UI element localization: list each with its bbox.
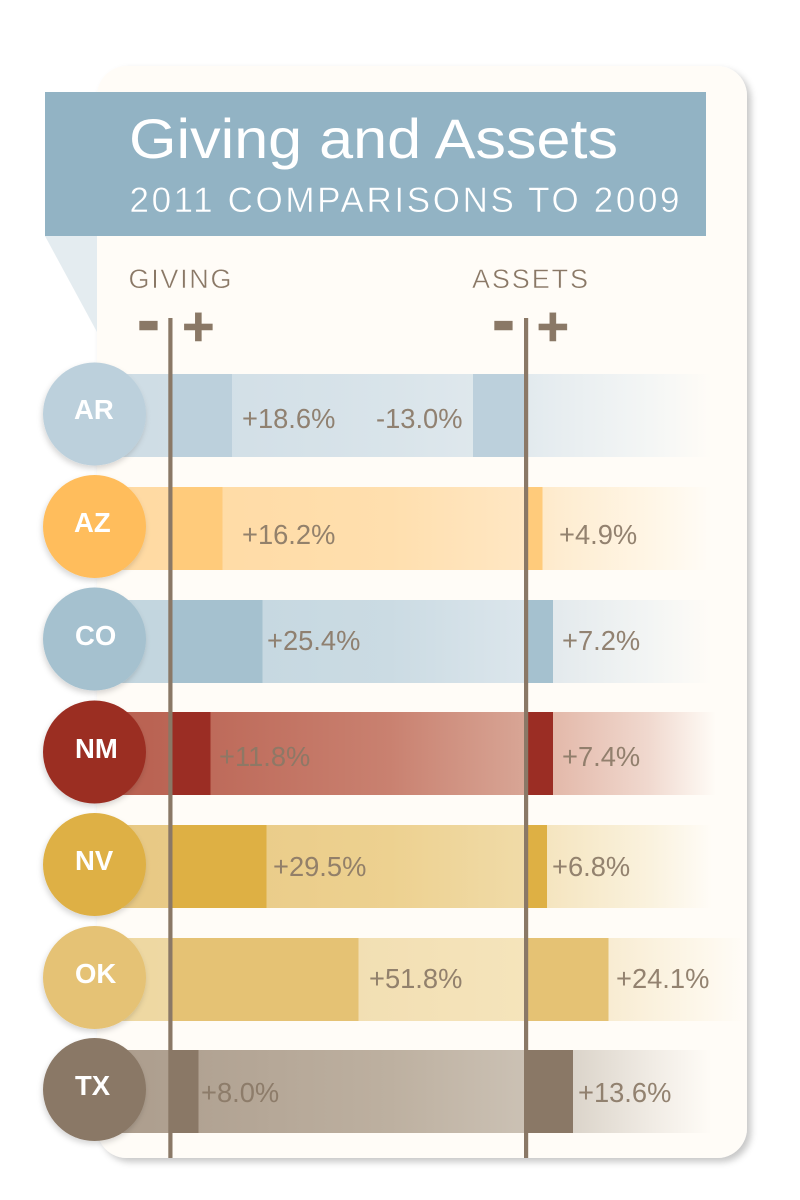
TX giving bar [170,1050,198,1133]
row: NM [97,712,716,795]
AZ giving value: +16.2% [242,519,335,550]
row: AZ [97,487,712,570]
state badge: AR [43,362,146,466]
state badge: OK [43,926,146,1029]
OK assets value: +24.1% [616,963,709,994]
state badge: NV [43,813,146,916]
state badge: AZ: AZ [74,507,111,538]
row: TX [97,1050,712,1133]
OK giving bar [172,938,358,1021]
NV giving bar [172,825,266,908]
row: NV [97,825,712,908]
giving axis line [168,318,172,1158]
title: Giving and Assets [129,107,618,170]
NM giving bar [172,712,210,795]
TX assets bar [526,1050,573,1133]
AR giving value: +18.6% [242,403,335,434]
CO assets value: +7.2% [562,625,640,656]
title banner [45,92,706,236]
TX giving value: +8.0% [201,1077,279,1108]
AZ giving bar [172,487,222,570]
state badge: TX [43,1038,146,1141]
NM giving value: +11.8% [219,741,310,772]
subtitle: 2011 COMPARISONS TO 2009 [130,181,680,220]
CO assets bar [527,600,553,683]
giving minus sign: - [138,282,159,356]
state badge: CO [43,588,146,690]
state badge: NM [43,700,146,804]
ribbon fold [45,236,97,332]
state badge: NV: NV [75,845,114,876]
OK assets bar [527,938,608,1021]
state badge: TX: TX [75,1070,111,1101]
column heading: giving: GIVING [128,264,232,294]
panel: card background [97,66,747,1158]
TX assets value: +13.6% [578,1077,671,1108]
NM assets bar [527,712,553,795]
AR assets value: -13.0% [376,403,462,434]
state badge: AZ [43,475,146,578]
CO giving value: +25.4% [267,625,360,656]
assets axis line [524,318,528,1158]
assets minus sign: - [492,282,514,356]
NV assets bar [527,825,547,908]
giving plus sign: + [182,294,215,358]
AZ assets value: +4.9% [559,519,637,550]
NV assets value: +6.8% [552,851,630,882]
column heading: assets: ASSETS [472,264,588,294]
OK giving value: +51.8% [369,963,462,994]
NM assets value: +7.4% [562,741,640,772]
AZ assets bar [527,487,542,570]
AR giving bar [172,374,232,457]
assets plus sign: + [536,294,569,358]
row: OK [97,938,745,1021]
NV giving value: +29.5% [273,851,366,882]
state badge: AR: AR [74,394,114,425]
state badge: NM: NM [75,733,118,764]
AR assets bar [473,374,525,457]
row: AR [97,374,712,457]
row: CO [97,600,712,683]
state badge: OK: OK [75,958,116,989]
CO giving bar [172,600,262,683]
state badge: CO: CO [75,620,116,651]
